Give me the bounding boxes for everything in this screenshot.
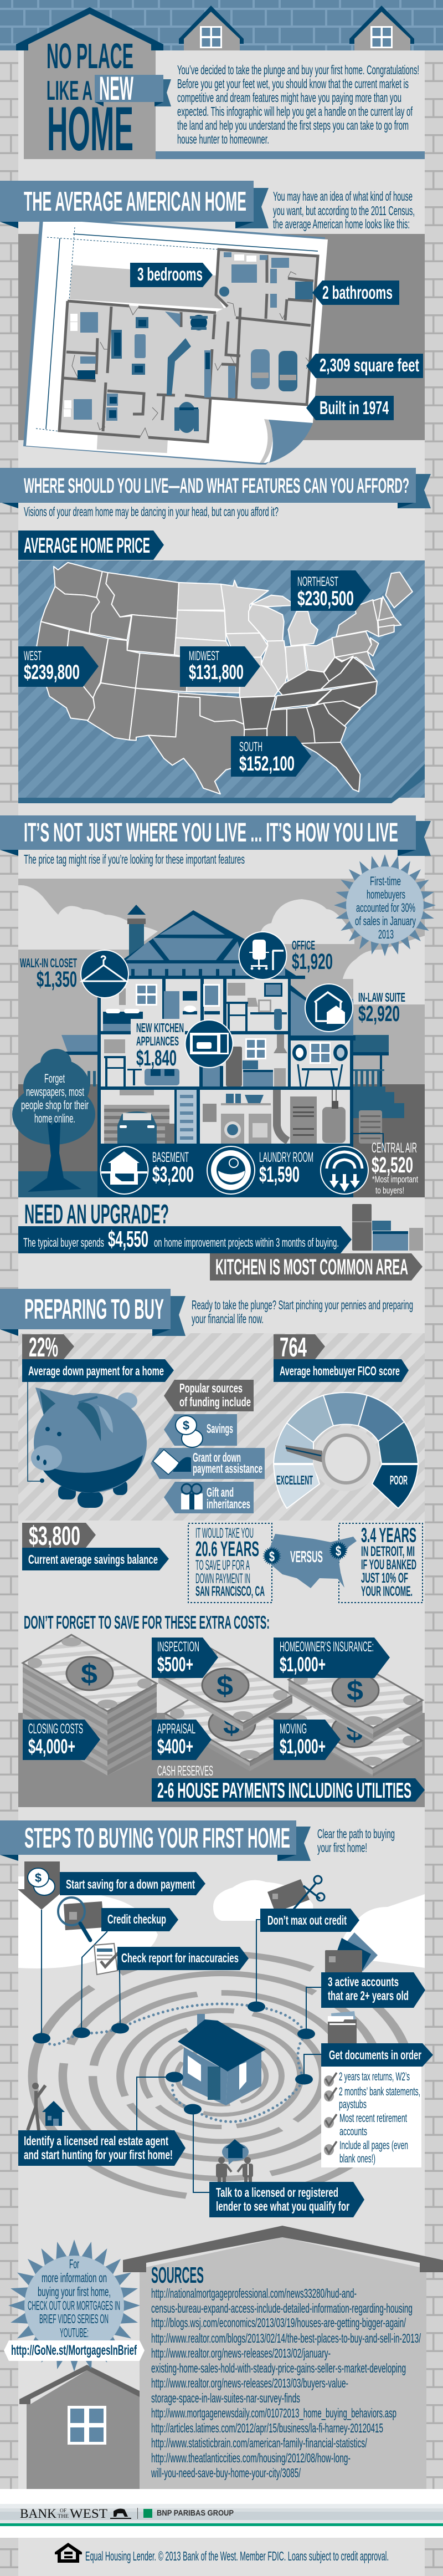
title house: LIKE A xyxy=(47,76,92,106)
tree with callout: people shop for their xyxy=(21,1098,89,1112)
footer logo band xyxy=(0,2489,443,2538)
tag: moving: MOVING xyxy=(280,1721,307,1737)
money stack: lower right: $ xyxy=(346,1716,363,1747)
title house: NEW xyxy=(99,70,133,107)
maze xyxy=(33,1954,410,2198)
panel: document checklist xyxy=(321,2067,421,2167)
tag: northeast price: $230,500 xyxy=(297,587,354,610)
heading: the average american home xyxy=(0,181,269,228)
tag: 3 active accounts: 3 active accounts xyxy=(328,1975,399,1989)
logo: Bank of the West: THE xyxy=(58,2513,69,2519)
callout: built in 1974: Built in 1974 xyxy=(320,397,389,418)
tree with callout: newspapers, most xyxy=(26,1085,84,1099)
tag: grant or down payment assistance: Grant or down xyxy=(193,1450,241,1465)
map: US states by region xyxy=(37,563,413,794)
tag: grant or down payment assistance: payment assistance xyxy=(193,1461,262,1476)
tag: $3,800: $3,800 xyxy=(29,1522,80,1551)
tag: inspection: $500+ xyxy=(157,1653,193,1676)
tag: gift and inheritances: Gift and xyxy=(207,1485,234,1499)
tag: northeast price xyxy=(291,570,371,611)
icon: document folder xyxy=(328,2011,357,2047)
tag: identify real estate agent xyxy=(18,2130,186,2166)
title house: NO PLACE xyxy=(47,36,133,76)
box: 20.6 years in San Francisco: 20.6 YEARS xyxy=(195,1538,259,1561)
feature: new kitchen appliances xyxy=(131,1019,233,1070)
tag: average down payment xyxy=(22,1359,174,1382)
panel: house cutaway: LAUNDRY ROOM xyxy=(259,1150,313,1165)
tag: 22 percent: 22% xyxy=(29,1333,58,1363)
text: average home intro xyxy=(273,189,415,231)
chart: credit score gauge xyxy=(274,1392,418,1508)
panel: document checklist: accounts xyxy=(339,2125,367,2138)
callout burst: mortgages in brief: YOUTUBE: xyxy=(60,2325,89,2340)
basement furnishings xyxy=(104,1090,346,1144)
house structure xyxy=(97,979,356,1197)
text: laundry price xyxy=(259,1150,313,1187)
tag: homeowner's insurance: $1,000+ xyxy=(280,1653,326,1676)
feature: new kitchen appliances: APPLIANCES xyxy=(136,1034,179,1048)
roof xyxy=(97,910,305,982)
box: 20.6 years in San Francisco: TO SAVE UP FOR A xyxy=(195,1558,250,1573)
tag: gift and inheritances xyxy=(164,1482,254,1513)
text: central air price: *Most important xyxy=(372,1174,418,1185)
tag: talk to lender xyxy=(209,2182,364,2217)
panel: US map with prices xyxy=(18,560,425,803)
box: 20.6 years in San Francisco xyxy=(188,1523,272,1603)
tag: start saving: Start saving for a down payment xyxy=(66,1877,195,1891)
tag: current average savings balance xyxy=(22,1548,169,1570)
heading: need an upgrade: NEED AN UPGRADE? xyxy=(24,1200,169,1230)
tag: 3 active accounts xyxy=(321,1972,425,2008)
callout burst: mortgages in brief: For xyxy=(69,2257,79,2271)
feature: in-law suite xyxy=(305,984,405,1032)
paper: blueprint sheet xyxy=(23,217,328,465)
tag: identify real estate agent: and start hunting for your first home! xyxy=(24,2147,173,2162)
panel: house cutaway xyxy=(12,854,436,1197)
icon: cut credit card xyxy=(267,1876,324,1912)
tag: appraisal xyxy=(152,1720,212,1760)
feature: new kitchen appliances: $1,840 xyxy=(136,1046,177,1070)
link label xyxy=(4,2340,145,2361)
tag: current average savings balance: Current average savings balance xyxy=(28,1552,158,1567)
dormer house icons xyxy=(179,6,414,50)
tag: credit checkup: Credit checkup xyxy=(107,1912,166,1926)
logo: Bank of the West: BANK xyxy=(20,2507,56,2521)
tag: average down payment: Average down payment for a home xyxy=(28,1364,164,1378)
tag: talk to lender: lender to see what you qualify for xyxy=(216,2199,349,2213)
arrow: start marker: $ xyxy=(35,1871,42,1885)
arrow: start marker xyxy=(18,1861,65,1910)
money stack: upper right xyxy=(289,1651,423,1742)
feature: office xyxy=(239,932,333,980)
logo: Bank of the West: WEST xyxy=(70,2507,107,2521)
box: 20.6 years in San Francisco: IT WOULD TAKE YOU xyxy=(195,1526,254,1541)
feature: in-law suite: IN-LAW SUITE xyxy=(358,990,405,1004)
callout burst: mortgages in brief: CHECK OUT OUR MORTGAGES IN xyxy=(28,2298,120,2313)
tree with callout: Forget xyxy=(44,1072,65,1085)
icon: two people with house bubble xyxy=(216,2139,253,2184)
tag: popular sources of funding: Popular sources xyxy=(179,1381,243,1395)
text: source list: will-you-need-save-buy-home-your-city/3085/ xyxy=(151,2466,301,2480)
tag: check report: Check report for inaccuracies xyxy=(121,1951,239,1965)
callout: 2 bathrooms xyxy=(312,280,399,305)
feature: walk-in closet: WALK-IN CLOSET xyxy=(20,956,77,970)
text: steps intro xyxy=(317,1827,395,1855)
logo: Bank of the West xyxy=(20,2507,234,2521)
map: versus: $ xyxy=(336,1543,341,1559)
feature: walk-in closet xyxy=(20,950,128,998)
tag: northeast price: NORTHEAST xyxy=(297,574,338,589)
text: basement price xyxy=(152,1150,194,1187)
tag: closing costs xyxy=(23,1720,100,1760)
text: steps intro: your first home! xyxy=(317,1840,367,1855)
connector lines and nodes xyxy=(33,1910,321,2192)
path: dotted route xyxy=(42,2004,306,2122)
illustration: money stacks xyxy=(23,1635,423,1777)
floor plan panel xyxy=(18,217,425,465)
tag: don't max out credit: Don’t max out credit xyxy=(267,1913,347,1927)
center house xyxy=(178,2014,266,2105)
tag: savings: $ xyxy=(183,1419,189,1432)
illustration: piggy bank xyxy=(28,1382,147,1508)
callout burst: first-time homebuyers: First-time xyxy=(370,874,401,888)
callout: 2 bathrooms: 2 bathrooms xyxy=(322,282,393,303)
money stack: lower right xyxy=(288,1692,422,1777)
feature: office: $1,920 xyxy=(292,950,333,974)
tree with callout xyxy=(12,1049,95,1192)
icon: basement xyxy=(101,1146,148,1194)
panel: document checklist: blank ones!) xyxy=(339,2152,375,2165)
tag: west price: $239,800 xyxy=(24,661,80,683)
text: basement price: BASEMENT xyxy=(152,1150,189,1165)
tag: start saving xyxy=(60,1872,205,1895)
text: source list xyxy=(151,2286,421,2480)
logo: Bank of the West: OF xyxy=(60,2508,66,2513)
text: source list: storage-space-in-law-suites-nar-survey-finds xyxy=(151,2391,300,2405)
side roofs and railings xyxy=(61,1035,404,1118)
text: central air price: to buyers! xyxy=(375,1185,404,1196)
callout: 3 bedrooms xyxy=(130,263,213,287)
tag: cash reserves: CASH RESERVES xyxy=(157,1763,213,1779)
panel: gray band behind money xyxy=(18,1713,425,1807)
tag: gift and inheritances: inheritances xyxy=(207,1497,250,1511)
box: 20.6 years in San Francisco: DOWN PAYMENT IN xyxy=(195,1571,250,1587)
title house: HOME xyxy=(47,94,133,164)
tag: closing costs: CLOSING COSTS xyxy=(28,1721,83,1737)
callout: 3 bedrooms: 3 bedrooms xyxy=(137,264,203,284)
callout burst: mortgages in brief xyxy=(4,2240,145,2371)
tag: midwest price: MIDWEST xyxy=(189,649,219,664)
money stack: tall left: $ xyxy=(81,1659,97,1690)
footer: equal housing disclaimer xyxy=(55,2543,389,2563)
feature: new kitchen appliances: NEW KITCHEN xyxy=(136,1021,184,1035)
money stack: upper middle: $ xyxy=(217,1670,233,1701)
tag: grant or down payment assistance xyxy=(151,1448,265,1479)
chart: credit score gauge: POOR xyxy=(390,1473,408,1487)
panel: striped background, preparing to buy xyxy=(18,1333,425,1521)
text: laundry price: $1,590 xyxy=(259,1162,300,1187)
tag: moving: $1,000+ xyxy=(280,1735,326,1758)
box: 20.6 years in San Francisco: SAN FRANCISCO, CA xyxy=(195,1584,265,1599)
check marks xyxy=(324,2073,337,2155)
callout burst: first-time homebuyers: 2013 xyxy=(378,927,394,941)
heading: steps to buying your first home xyxy=(0,1820,311,1861)
tag: appraisal: APPRAISAL xyxy=(157,1721,195,1737)
feature: walk-in closet: $1,350 xyxy=(37,967,77,992)
tag: cash reserves xyxy=(152,1763,425,1803)
tag: west price: WEST xyxy=(24,649,42,664)
box: 3.4 years in Detroit xyxy=(339,1523,423,1603)
money stack: upper right: $ xyxy=(347,1675,363,1706)
callout: square feet xyxy=(306,354,423,378)
tag: homeowner's insurance xyxy=(274,1638,390,1678)
intro text xyxy=(177,63,419,146)
house: sources xyxy=(123,2226,443,2489)
house: sources: SOURCES xyxy=(151,2262,204,2288)
money stack: lower middle xyxy=(165,1685,299,1771)
tag: average home price xyxy=(18,530,164,560)
tag: identify real estate agent: Identify a licensed real estate agent xyxy=(24,2134,168,2148)
tag: south price xyxy=(231,736,311,777)
callout burst: mortgages in brief: BRIEF VIDEO SERIES ON xyxy=(39,2312,109,2326)
title house xyxy=(16,7,425,164)
icon: central air xyxy=(321,1146,368,1194)
tag: typical buyer spends: $4,550 xyxy=(108,1226,148,1252)
tag: moving xyxy=(274,1720,341,1760)
tag: get documents in order xyxy=(321,2043,433,2067)
logo: Bank of the West: BNP PARIBAS GROUP xyxy=(157,2508,234,2518)
callout burst: mortgages in brief: buying your first home, xyxy=(38,2284,111,2299)
icon: credit report with check xyxy=(94,1944,121,1975)
map: versus: VERSUS xyxy=(290,1548,323,1566)
chart: credit score gauge: EXCELLENT xyxy=(276,1473,313,1487)
map: versus xyxy=(262,1534,357,1588)
link label: http://GoNe.st/MortgagesInBrief xyxy=(11,2343,137,2358)
tag: average home price: AVERAGE HOME PRICE xyxy=(24,534,150,558)
callout: built in 1974 xyxy=(306,396,394,420)
map: versus: $ xyxy=(269,1549,275,1564)
feature: office: OFFICE xyxy=(292,938,315,952)
panel: document checklist: paystubs xyxy=(339,2098,367,2111)
house: bottom left with window xyxy=(19,2365,140,2489)
text: how you live subtitle: The price tag might rise if you’re looking for these important features xyxy=(24,852,245,866)
icon: card with magnifier xyxy=(58,1897,104,1940)
tag: credit checkup xyxy=(101,1908,178,1931)
tag: appraisal: $400+ xyxy=(157,1735,193,1758)
tag: don't max out credit xyxy=(260,1909,359,1932)
tag: south price: SOUTH xyxy=(239,739,262,754)
tag: inspection: INSPECTION xyxy=(157,1639,199,1655)
text: preparing intro xyxy=(192,1298,413,1326)
heading: where should you live xyxy=(0,468,431,508)
feature: in-law suite: $2,920 xyxy=(358,1002,400,1026)
tag: average FICO score xyxy=(274,1359,409,1382)
callout burst: mortgages in brief: more information on xyxy=(42,2271,107,2285)
heading: how you live xyxy=(0,815,431,856)
upstairs furnishings xyxy=(103,983,287,1031)
text: central air price: $2,520 xyxy=(372,1153,413,1177)
floor plan drawing xyxy=(59,249,318,442)
tag: popular sources of funding: of funding include xyxy=(179,1395,251,1409)
chimney xyxy=(127,905,146,962)
money stack: lower middle: $ xyxy=(223,1709,240,1740)
tree with callout: home online. xyxy=(34,1111,75,1125)
tag: 764: 764 xyxy=(280,1333,307,1363)
tag: talk to lender: Talk to a licensed or registered xyxy=(216,2185,338,2200)
heading: preparing to buy xyxy=(0,1289,186,1336)
tag: typical buyer spends xyxy=(18,1226,352,1253)
icon: kitchen appliances xyxy=(352,1204,423,1251)
icon: laundry xyxy=(207,1146,255,1194)
tag: midwest price xyxy=(180,646,260,687)
tag: savings: Savings xyxy=(207,1421,233,1436)
tag: closing costs: $4,000+ xyxy=(28,1735,75,1758)
money stack: upper middle xyxy=(158,1646,292,1731)
tag: check report xyxy=(117,1947,249,1970)
tag: midwest price: $131,800 xyxy=(189,661,244,683)
tag: south price: $152,100 xyxy=(239,752,295,775)
intro text: house hunter to homeowner. xyxy=(177,132,269,146)
tag: west price xyxy=(18,646,99,687)
tag: popular sources of funding xyxy=(164,1380,254,1411)
icon: three cards xyxy=(325,1932,378,1973)
AC unit xyxy=(353,1110,383,1150)
text: basement price: $3,200 xyxy=(152,1162,194,1187)
text: preparing intro: your financial life now. xyxy=(192,1312,264,1326)
tag: typical buyer spends: The typical buyer spends xyxy=(23,1236,104,1249)
tag: inspection xyxy=(152,1638,218,1678)
icon: agent and small house xyxy=(28,2083,65,2130)
callout burst: first-time homebuyers: homebuyers xyxy=(367,887,405,901)
text: central air price xyxy=(372,1140,418,1196)
callout burst: first-time homebuyers xyxy=(334,854,436,956)
tag: savings xyxy=(164,1414,237,1447)
clouds behind steps xyxy=(18,1876,425,1968)
middle floor furnishings xyxy=(104,1034,348,1086)
heading: preparing to buy: PREPARING TO BUY xyxy=(24,1293,164,1325)
money stack: tall left xyxy=(23,1635,157,1776)
